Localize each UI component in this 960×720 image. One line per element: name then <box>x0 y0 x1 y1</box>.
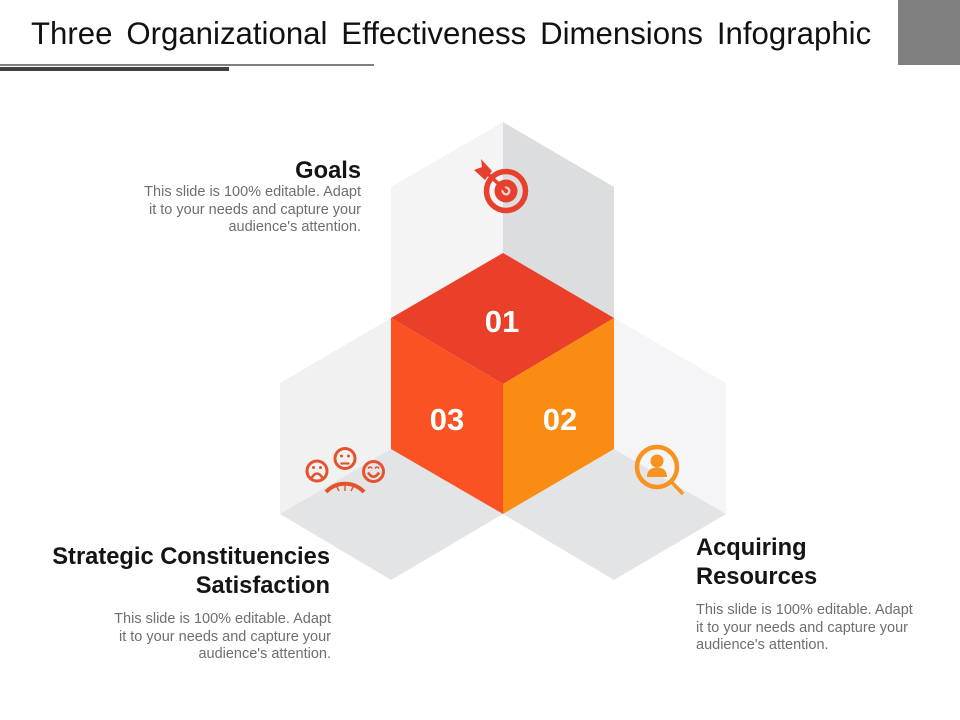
heading: Goals: Goals <box>295 158 361 184</box>
description: Acquiring Resources: This slide is 100% editable. Adapt <box>696 602 913 618</box>
title underline <box>0 64 374 71</box>
cube face 02 <box>503 318 614 514</box>
cube face 02: 02 <box>543 402 577 437</box>
cube face 01: 01 <box>485 304 519 339</box>
description: Goals: audience's attention. <box>228 219 361 235</box>
icon: happy face <box>364 462 384 482</box>
panel: left hexagon <box>280 318 503 580</box>
panel: right hexagon <box>503 318 726 580</box>
description: Acquiring Resources: it to your needs and capture your <box>696 620 908 636</box>
text block: Acquiring Resources <box>696 535 913 653</box>
description: Strategic Constituencies Satisfaction <box>114 611 331 662</box>
cube face 01 <box>391 253 614 384</box>
cube face 03 <box>391 318 503 514</box>
panel: top hexagon <box>391 122 614 384</box>
text block: Goals <box>144 158 361 235</box>
heading: Strategic Constituencies Satisfaction <box>52 544 330 599</box>
icon: target with arrow <box>474 159 526 210</box>
icon: gauge <box>326 483 364 492</box>
heading: Acquiring Resources: Acquiring <box>696 535 807 561</box>
heading: Strategic Constituencies Satisfaction: Satisfaction <box>196 573 330 599</box>
heading: Acquiring Resources: Resources <box>696 564 817 590</box>
heading: Acquiring Resources <box>696 535 817 590</box>
title: Three Organizational Effectiveness Dimensions Infographic <box>31 16 871 51</box>
cube face 03: 03 <box>430 402 464 437</box>
description: Strategic Constituencies Satisfaction: audience's attention. <box>198 646 331 662</box>
description: Goals: it to your needs and capture your <box>149 202 361 218</box>
description: Acquiring Resources: audience's attention. <box>696 637 829 653</box>
corner block <box>898 0 960 65</box>
icon: sad face <box>307 461 327 481</box>
icon: neutral face <box>335 448 355 468</box>
description: Acquiring Resources <box>696 602 913 653</box>
text block: Strategic Constituencies Satisfaction <box>52 544 331 662</box>
icon: satisfaction faces and gauge <box>307 448 384 492</box>
description: Goals <box>144 184 361 235</box>
heading: Strategic Constituencies Satisfaction: Strategic Constituencies <box>52 544 330 570</box>
description: Strategic Constituencies Satisfaction: This slide is 100% editable. Adapt <box>114 611 331 627</box>
description: Strategic Constituencies Satisfaction: it to your needs and capture your <box>119 628 331 644</box>
description: Goals: This slide is 100% editable. Adapt <box>144 184 361 200</box>
icon: magnifier with person <box>637 447 683 494</box>
